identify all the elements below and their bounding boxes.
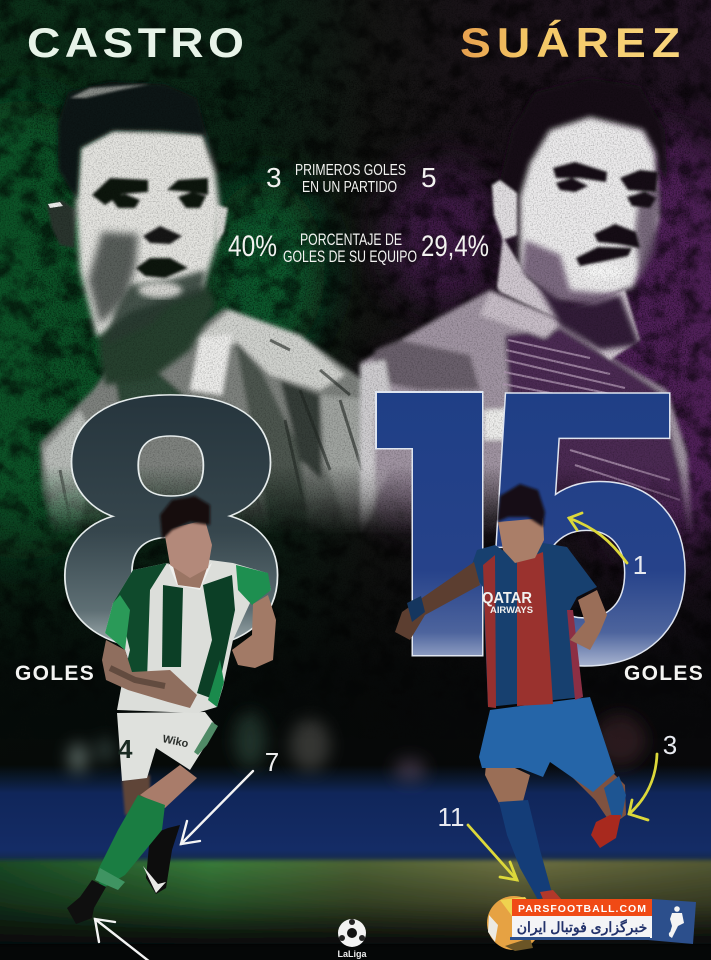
Suárez face: [520, 117, 658, 300]
Suárez stubble: [522, 240, 620, 305]
big number 15: [375, 391, 686, 667]
Castro stubble: [105, 270, 205, 345]
title: Suárez: SUÁREZ: [460, 19, 686, 67]
face: [164, 520, 212, 578]
number 11: 11: [438, 802, 464, 832]
left arm: [102, 640, 197, 708]
front boot: [540, 890, 562, 904]
stat: share of team goals: PORCENTAJE DE: [300, 230, 402, 249]
background grain: [0, 0, 711, 647]
hair: [497, 484, 545, 527]
sleeves and collar: [105, 595, 130, 650]
Castro eyes and brows: [92, 178, 208, 278]
stat: first goals in a match: EN UN PARTIDO: [302, 179, 397, 196]
player: Suárez: AIRWAYS: [490, 605, 533, 615]
player glyph: [669, 906, 684, 938]
neck and face: [498, 518, 544, 563]
shorts: [479, 697, 615, 792]
number 3: 3: [663, 730, 677, 760]
orange bar: [512, 899, 652, 916]
neck: [170, 555, 208, 588]
big number 8: 8: [56, 327, 286, 718]
sponsor: QATAR: [482, 590, 532, 607]
Suárez chin highlight: [584, 265, 624, 279]
jersey: [105, 560, 271, 713]
arrow: yellow 1: [569, 513, 627, 563]
Castro jersey: [40, 308, 390, 550]
portrait grain: [30, 80, 690, 530]
player: Castro: [67, 496, 276, 924]
front leg skin: [140, 765, 197, 808]
arrow: yellow 11: [468, 825, 517, 880]
jersey: [470, 543, 597, 707]
stat: first goals in a match: PRIMEROS GOLES: [295, 162, 406, 179]
shorts sponsor: Wiko: [161, 733, 190, 750]
stat: first goals in a match: 3: [266, 162, 282, 193]
digit 1: 1: [350, 311, 635, 736]
Suárez right face shadow: [635, 190, 660, 280]
Castro face: [76, 130, 220, 337]
Castro jersey streaks: [60, 340, 362, 530]
Suárez ear: [492, 180, 517, 240]
Castro hair: [58, 82, 216, 200]
digit 1: [375, 391, 484, 656]
title: Castro: CASTRO: [27, 20, 248, 67]
white bar: [512, 916, 652, 938]
Suárez shirt: [360, 290, 693, 540]
stat: share of team goals: 40%: [228, 230, 277, 263]
Castro hair highlight: [70, 84, 150, 98]
Castro cheek shadow: [88, 232, 138, 325]
Castro ear left: [47, 200, 76, 248]
ball: [487, 896, 541, 951]
watermark: Parsfootball: خبرگزاری فوتبال ایران: [517, 919, 647, 936]
Suárez neck: [497, 237, 640, 360]
Suárez hair: [500, 78, 668, 200]
Castro ear right: [216, 205, 228, 244]
bokeh lights: [69, 712, 646, 782]
front foot: [67, 880, 106, 924]
front thigh: [485, 755, 530, 805]
stat: first goals in a match: 5: [421, 162, 437, 193]
right arm: [232, 595, 276, 668]
arm left: [395, 562, 480, 640]
Suárez portrait: [360, 78, 693, 540]
jersey stripes: [162, 585, 183, 667]
shorts: [117, 712, 217, 781]
arm right: [570, 590, 607, 650]
Castro chin highlight: [138, 282, 182, 298]
Castro neck: [97, 280, 215, 385]
arrow: yellow 3: [629, 754, 657, 820]
blue emblem: [648, 899, 696, 944]
number 1: 1: [633, 550, 647, 580]
grass: [0, 860, 711, 944]
hair: [160, 496, 210, 540]
LaLiga logo: LaLiga: [337, 949, 367, 959]
stat: first goals in a match: [266, 162, 437, 196]
stat: share of team goals: GOLES DE SU EQUIPO: [283, 247, 417, 266]
stadium blue band: [0, 765, 711, 865]
player: Suárez: [395, 484, 626, 904]
digit 5: 5: [480, 313, 692, 740]
arrow: white 7: [181, 771, 253, 844]
Suárez collar stripes: [503, 340, 680, 500]
label: Castro goles: GOLES: [15, 662, 95, 685]
digit 5: 5: [480, 313, 692, 740]
arrow: white foot: [95, 919, 150, 960]
shorts number: 4: [118, 734, 133, 764]
jersey stripes: [483, 555, 496, 708]
big number 8: 8: [56, 327, 286, 718]
stat: share of team goals: [228, 230, 489, 266]
stat: share of team goals: 29,4%: [421, 230, 489, 263]
rear leg: [565, 770, 626, 825]
LaLiga logo: [337, 919, 367, 959]
watermark: Parsfootball: PARSFOOTBALL.COM: [518, 903, 647, 915]
Suárez eyes and brows: [553, 162, 658, 266]
label: Suárez goles: GOLES: [624, 662, 704, 685]
wristband: [407, 596, 425, 622]
watermark: Parsfootball: [510, 899, 696, 944]
Suárez neck shadow: [535, 280, 640, 350]
Castro portrait: [40, 82, 390, 550]
green sock: [98, 795, 165, 890]
rear leg: [122, 775, 150, 815]
number 7: 7: [265, 747, 279, 777]
blue sock: [499, 800, 552, 900]
red boot: [591, 815, 621, 848]
